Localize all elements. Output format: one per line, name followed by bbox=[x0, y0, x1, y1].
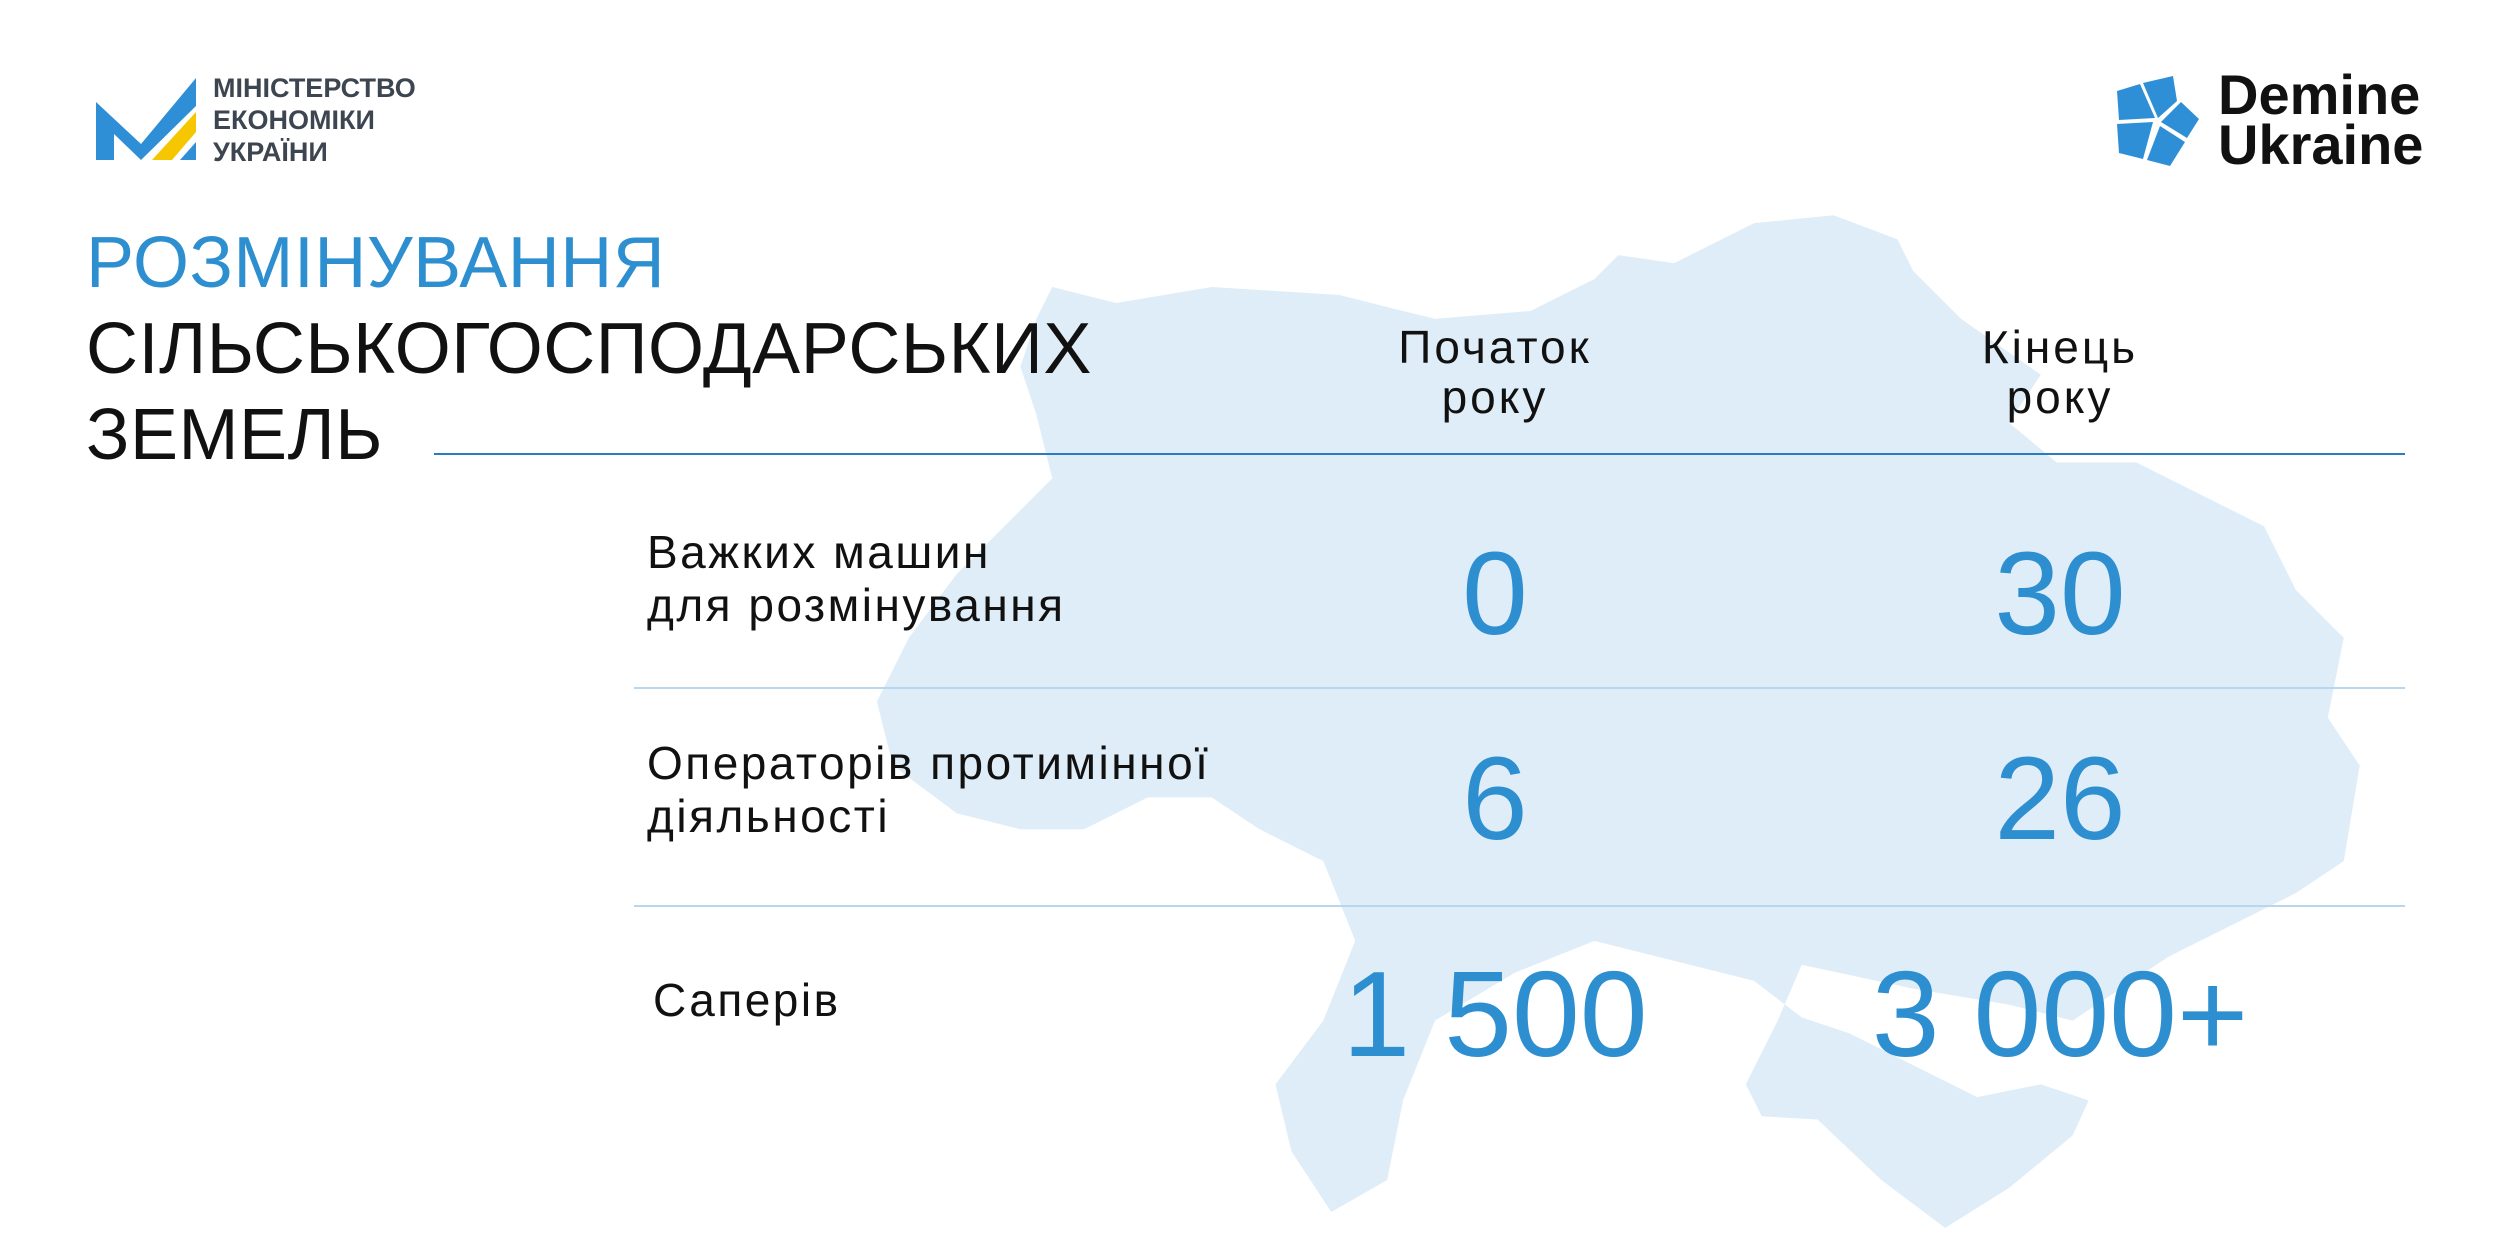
number end: 26 bbox=[1994, 733, 2126, 865]
label bbox=[647, 737, 1210, 842]
column header: end of year bbox=[1982, 321, 2138, 423]
text: ministry name: ЕКОНОМІКИ bbox=[213, 105, 375, 135]
column header: start of year: Початок bbox=[1398, 321, 1592, 373]
title bbox=[86, 223, 1092, 475]
label: Операторів протимінної bbox=[647, 737, 1210, 789]
text: ministry name bbox=[213, 73, 416, 167]
column header: end of year: Кінець bbox=[1982, 321, 2138, 373]
label: Саперів bbox=[653, 974, 841, 1026]
header line bbox=[434, 453, 2405, 455]
label: діяльності bbox=[647, 790, 890, 842]
number end: 30 bbox=[1994, 528, 2126, 660]
logo: Ministry of Economy bbox=[96, 73, 416, 167]
title: ЗЕМЕЛЬ bbox=[86, 395, 383, 475]
title: СІЛЬСЬКОГОСПОДАРСЬКИХ bbox=[86, 309, 1092, 389]
number start: 0 bbox=[1462, 528, 1528, 660]
text: ministry name: МІНІСТЕРСТВО bbox=[213, 73, 416, 103]
row: operators bbox=[647, 733, 2126, 865]
label: Важких машин bbox=[647, 526, 991, 578]
column header: start of year: року bbox=[1442, 371, 1548, 423]
label: для розмінування bbox=[647, 579, 1066, 631]
number start: 6 bbox=[1462, 733, 1528, 865]
text: Demine Ukraine: Demine bbox=[2218, 63, 2420, 126]
logo: Demine Ukraine bbox=[2117, 63, 2423, 176]
icon: pinwheel bbox=[2117, 76, 2199, 166]
number end: 3 000+ bbox=[1872, 946, 2248, 1082]
column header: end of year: року bbox=[2007, 371, 2113, 423]
text: ministry name: УКРАЇНИ bbox=[213, 137, 328, 167]
text: Demine Ukraine: Ukraine bbox=[2218, 113, 2423, 176]
title: РОЗМІНУВАННЯ bbox=[86, 223, 665, 303]
row: heavy machines bbox=[647, 526, 2126, 660]
column header: start of year bbox=[1398, 321, 1592, 423]
number start: 1 500 bbox=[1342, 946, 1648, 1082]
row: sappers bbox=[653, 946, 2248, 1082]
text: Demine Ukraine bbox=[2218, 63, 2423, 176]
icon: ministry M bbox=[96, 78, 196, 160]
label bbox=[647, 526, 1066, 631]
